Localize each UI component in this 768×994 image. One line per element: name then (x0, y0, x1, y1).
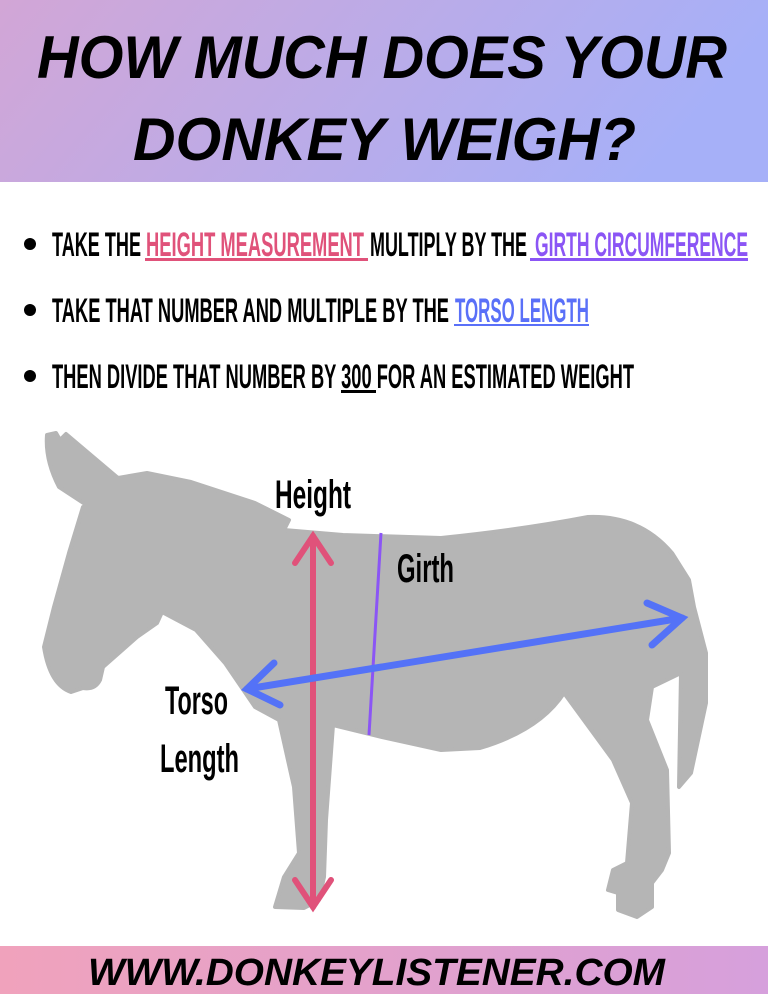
instruction list (24, 226, 748, 396)
diagram labels (160, 473, 454, 781)
header banner (0, 0, 768, 182)
instruction list: TORSO LENGTH (455, 292, 589, 330)
footer banner (0, 946, 768, 994)
diagram labels: Girth (397, 547, 454, 591)
donkey silhouette (44, 433, 706, 917)
line: girth (369, 533, 381, 735)
title (37, 24, 727, 173)
diagram labels: Height (275, 473, 351, 517)
bullet 1: TAKE THE (52, 226, 141, 264)
title: HOW MUCH DOES YOUR (37, 24, 727, 91)
diagram labels: Length (160, 737, 239, 781)
diagram labels: Torso (165, 679, 228, 723)
bullet 1 (24, 226, 748, 264)
bullet 1: HEIGHT MEASUREMENT (146, 226, 364, 264)
arrow: torso length (247, 603, 682, 705)
title: DONKEY WEIGH? (133, 106, 636, 173)
footer url: WWW.DONKEYLISTENER.COM (88, 952, 666, 994)
bullet 1: MULTIPLY BY THE (370, 226, 527, 264)
arrow: height (295, 536, 331, 907)
